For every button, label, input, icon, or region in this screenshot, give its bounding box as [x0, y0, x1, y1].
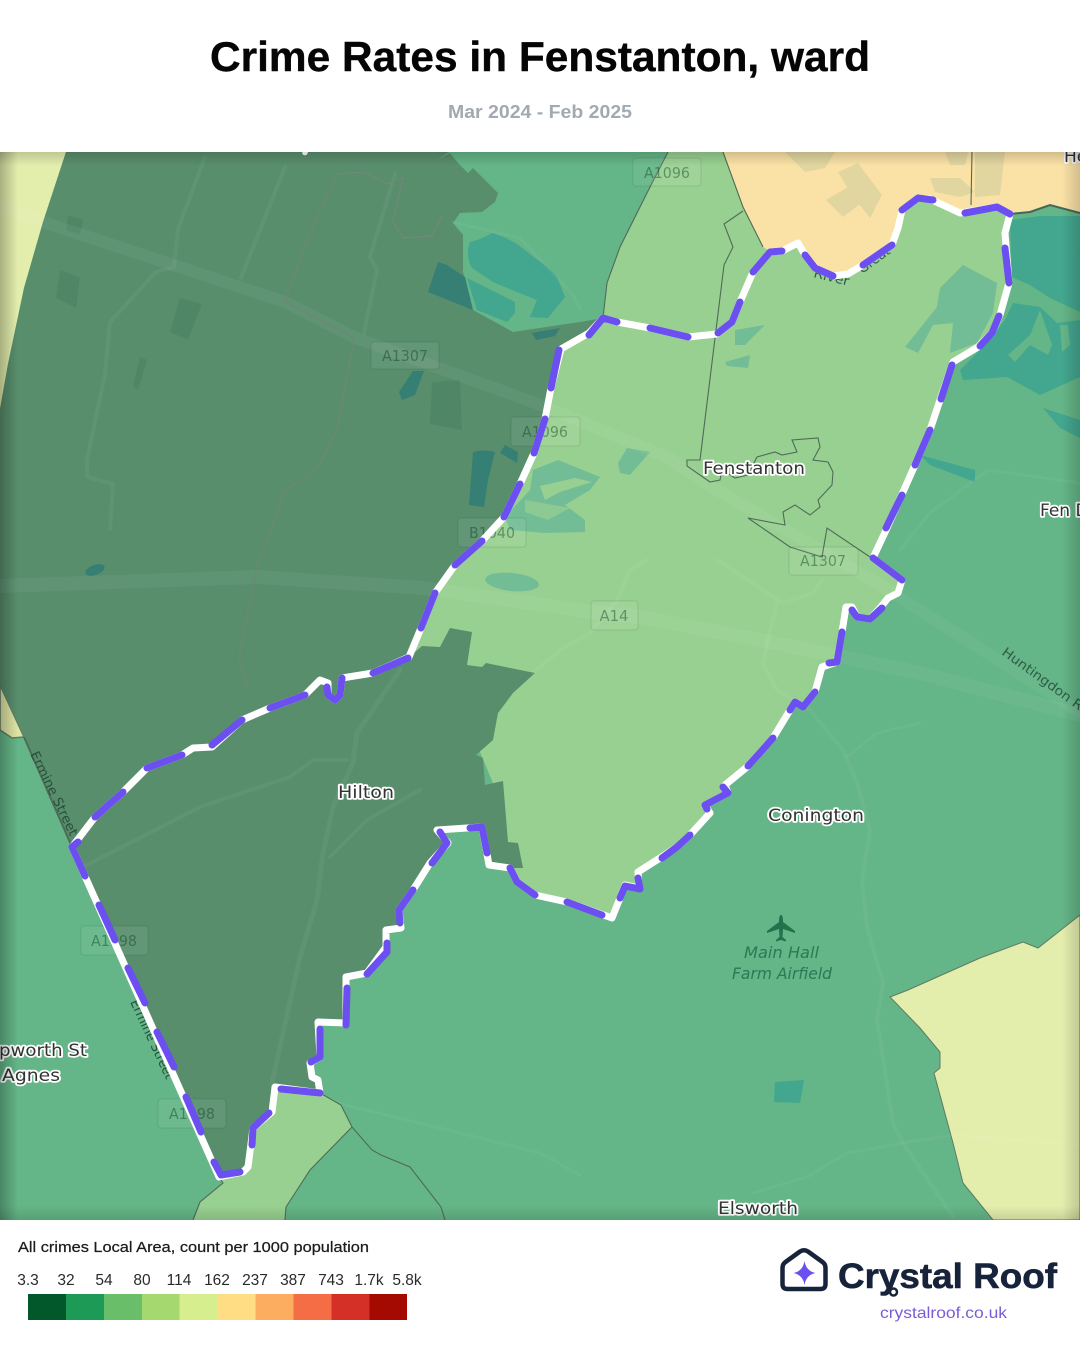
legend values: 387: [280, 1272, 306, 1289]
legend values: 3.3: [17, 1272, 39, 1289]
place label: Papworth St Agnes: Agnes: [2, 1066, 60, 1086]
legend values: 743: [318, 1272, 344, 1289]
legend colour scale: [28, 1294, 407, 1320]
road label: A1198 south: A1198: [169, 1105, 215, 1123]
place label: Fenstanton: Fenstanton: [703, 459, 805, 479]
area: pale yellow sliver west: [0, 685, 24, 738]
logo wordmark: Crystal Roof: [838, 1257, 1057, 1296]
road label: A1198 north: A1198: [91, 932, 137, 950]
field patches in dark area: [56, 215, 462, 430]
built-up patches in orange area: [785, 152, 1005, 218]
road label: A1198 north: [81, 926, 148, 955]
airfield label: Farm Airfield: [732, 964, 833, 983]
area: pale yellow south-east: [890, 915, 1080, 1220]
road label: A1096 north: A1096: [644, 164, 690, 182]
area: light green south: [193, 1087, 352, 1220]
road label: A1307 west: [371, 342, 439, 369]
legend title: All crimes Local Area, count per 1000 population: [18, 1239, 369, 1256]
legend values: 80: [133, 1272, 151, 1289]
area: light green Fenstanton ward and north: [409, 152, 1010, 918]
map edge vignette: [0, 152, 1080, 1220]
river label: River: River: [812, 266, 851, 290]
road label: A1096 north: [633, 158, 701, 186]
road label: A1096 centre: [511, 417, 580, 446]
road label: A14: A14: [600, 607, 628, 625]
lakes in mid green: [467, 216, 1080, 1103]
area: dark green Hilton and west: [0, 152, 603, 1177]
roads: [72, 232, 1080, 1145]
ward boundary: purple dashes: [72, 198, 1010, 1175]
road label: A1307 east: A1307: [800, 552, 846, 570]
place label: Papworth St Agnes: pworth St: [0, 1041, 87, 1061]
legend values: 114: [167, 1272, 192, 1289]
lakes in light green area: [484, 265, 997, 594]
faint parish line west: [239, 174, 354, 688]
road label: B1040: [458, 518, 526, 547]
airfield label: [732, 943, 833, 983]
place label: Hilton: Hilton: [338, 783, 394, 803]
area: pale yellow north-west: [0, 152, 66, 409]
legend values: 1.7k: [354, 1272, 384, 1289]
river boundary line: [1010, 205, 1080, 214]
road label: A1096 centre: A1096: [522, 423, 568, 441]
street label: Ermine Street south: Ermine Street: [126, 997, 176, 1082]
area: orange north: [723, 152, 1080, 276]
lake islands in light area: [525, 478, 592, 520]
lake islands east: [1008, 310, 1070, 362]
water in dark green area: [84, 262, 560, 578]
river label: Great: Great: [856, 244, 893, 277]
thin ward boundary lines: [24, 152, 972, 1220]
legend values: [17, 1272, 422, 1289]
road label: A1198 south: [158, 1099, 226, 1128]
legend: [17, 1239, 422, 1320]
place label: Conington: Conington: [768, 806, 864, 826]
website link: crystalroof.co.uk: [880, 1305, 1008, 1322]
logo key detail on y: [890, 1288, 897, 1296]
legend values: 162: [204, 1272, 230, 1289]
subtitle: date range: Mar 2024 - Feb 2025: [448, 101, 632, 122]
street label: Ermine Street north: Ermine Street: [26, 749, 80, 838]
airfield icon: plane: [767, 915, 795, 942]
road label: A14: [591, 601, 638, 630]
legend values: 54: [95, 1272, 113, 1289]
faint parish line in dark area: [338, 172, 443, 238]
logo: Crystal Roof: [782, 1250, 1057, 1322]
road label: A1307 west: A1307: [382, 347, 428, 365]
legend values: 5.8k: [392, 1272, 422, 1289]
place label: Papworth St Agnes: [0, 1041, 87, 1086]
icon: house with star: [782, 1250, 826, 1289]
legend values: 237: [242, 1272, 268, 1289]
base area: mid green: [0, 152, 1080, 1220]
place label: clipped top: Needingworth: [268, 135, 336, 155]
legend values: 32: [57, 1272, 75, 1289]
road label: A1307 east: [789, 547, 858, 575]
ward boundary: white line: [72, 198, 1010, 1177]
place label: Elsworth: Elsworth: [718, 1199, 798, 1219]
road label: B1040: B1040: [469, 524, 515, 542]
title: Crime Rates in Fenstanton, ward: [210, 33, 870, 80]
airfield label: Main Hall: [744, 943, 820, 962]
